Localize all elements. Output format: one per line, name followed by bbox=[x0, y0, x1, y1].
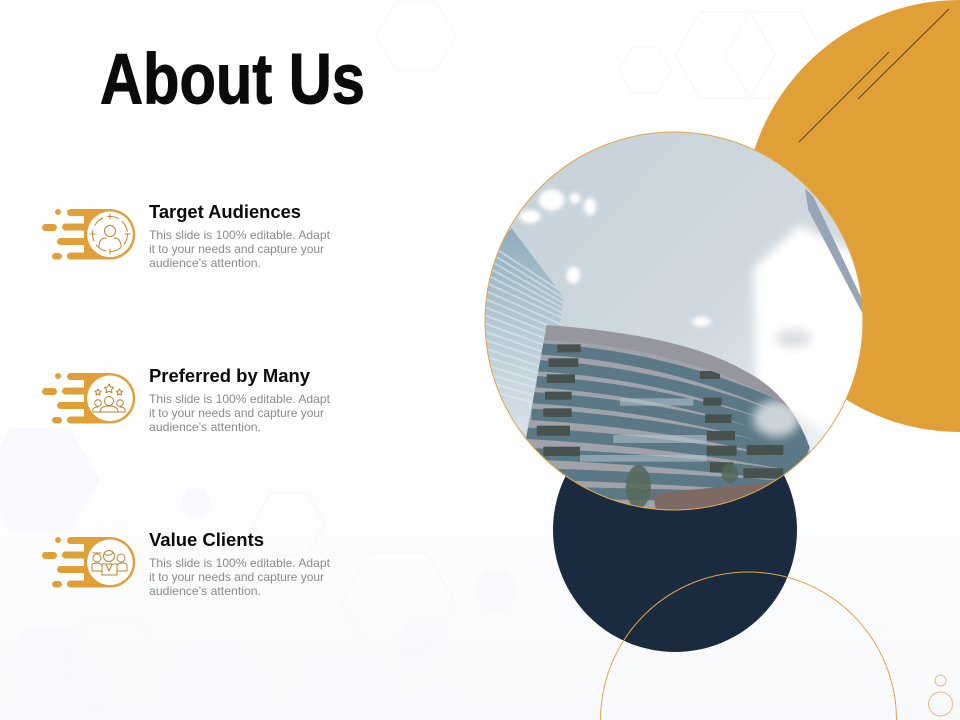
heading: Value Clients bbox=[149, 529, 264, 550]
heading: Preferred by Many bbox=[149, 365, 311, 386]
clouds bbox=[519, 189, 870, 458]
pale mist on building bbox=[753, 400, 800, 437]
body text: audience's attention. bbox=[149, 420, 261, 434]
title: About Us bbox=[100, 40, 365, 119]
item: Value Clients bbox=[42, 529, 331, 598]
icon: rated group bbox=[42, 373, 135, 424]
item: Target Audiences bbox=[42, 201, 331, 270]
small outline circles bbox=[928, 675, 952, 716]
photo thin orange border bbox=[485, 132, 863, 510]
item: Preferred by Many bbox=[42, 365, 331, 434]
body text: audience's attention. bbox=[149, 584, 261, 598]
sky bbox=[508, 132, 862, 452]
body text: it to your needs and capture your bbox=[149, 406, 324, 420]
orange circle bbox=[744, 0, 960, 432]
body text: This slide is 100% editable. Adapt bbox=[149, 392, 331, 406]
icon: clients bbox=[42, 537, 135, 588]
body text: audience's attention. bbox=[149, 256, 261, 270]
right tower bbox=[805, 188, 863, 315]
left tower bbox=[486, 228, 564, 434]
body text: This slide is 100% editable. Adapt bbox=[149, 228, 331, 242]
outline circle bottom bbox=[600, 572, 896, 720]
body text: it to your needs and capture your bbox=[149, 242, 324, 256]
icon: target audience bbox=[42, 209, 135, 260]
body text: This slide is 100% editable. Adapt bbox=[149, 556, 331, 570]
brick plaza bbox=[653, 482, 772, 510]
heading: Target Audiences bbox=[149, 201, 301, 222]
navy circle bbox=[553, 408, 797, 652]
body text: it to your needs and capture your bbox=[149, 570, 324, 584]
roof band bbox=[544, 325, 788, 407]
decorative diagonal lines on orange circle bbox=[799, 9, 949, 142]
trees bbox=[626, 463, 738, 508]
main building bbox=[526, 325, 810, 508]
photo: office building in circle bbox=[480, 125, 870, 522]
